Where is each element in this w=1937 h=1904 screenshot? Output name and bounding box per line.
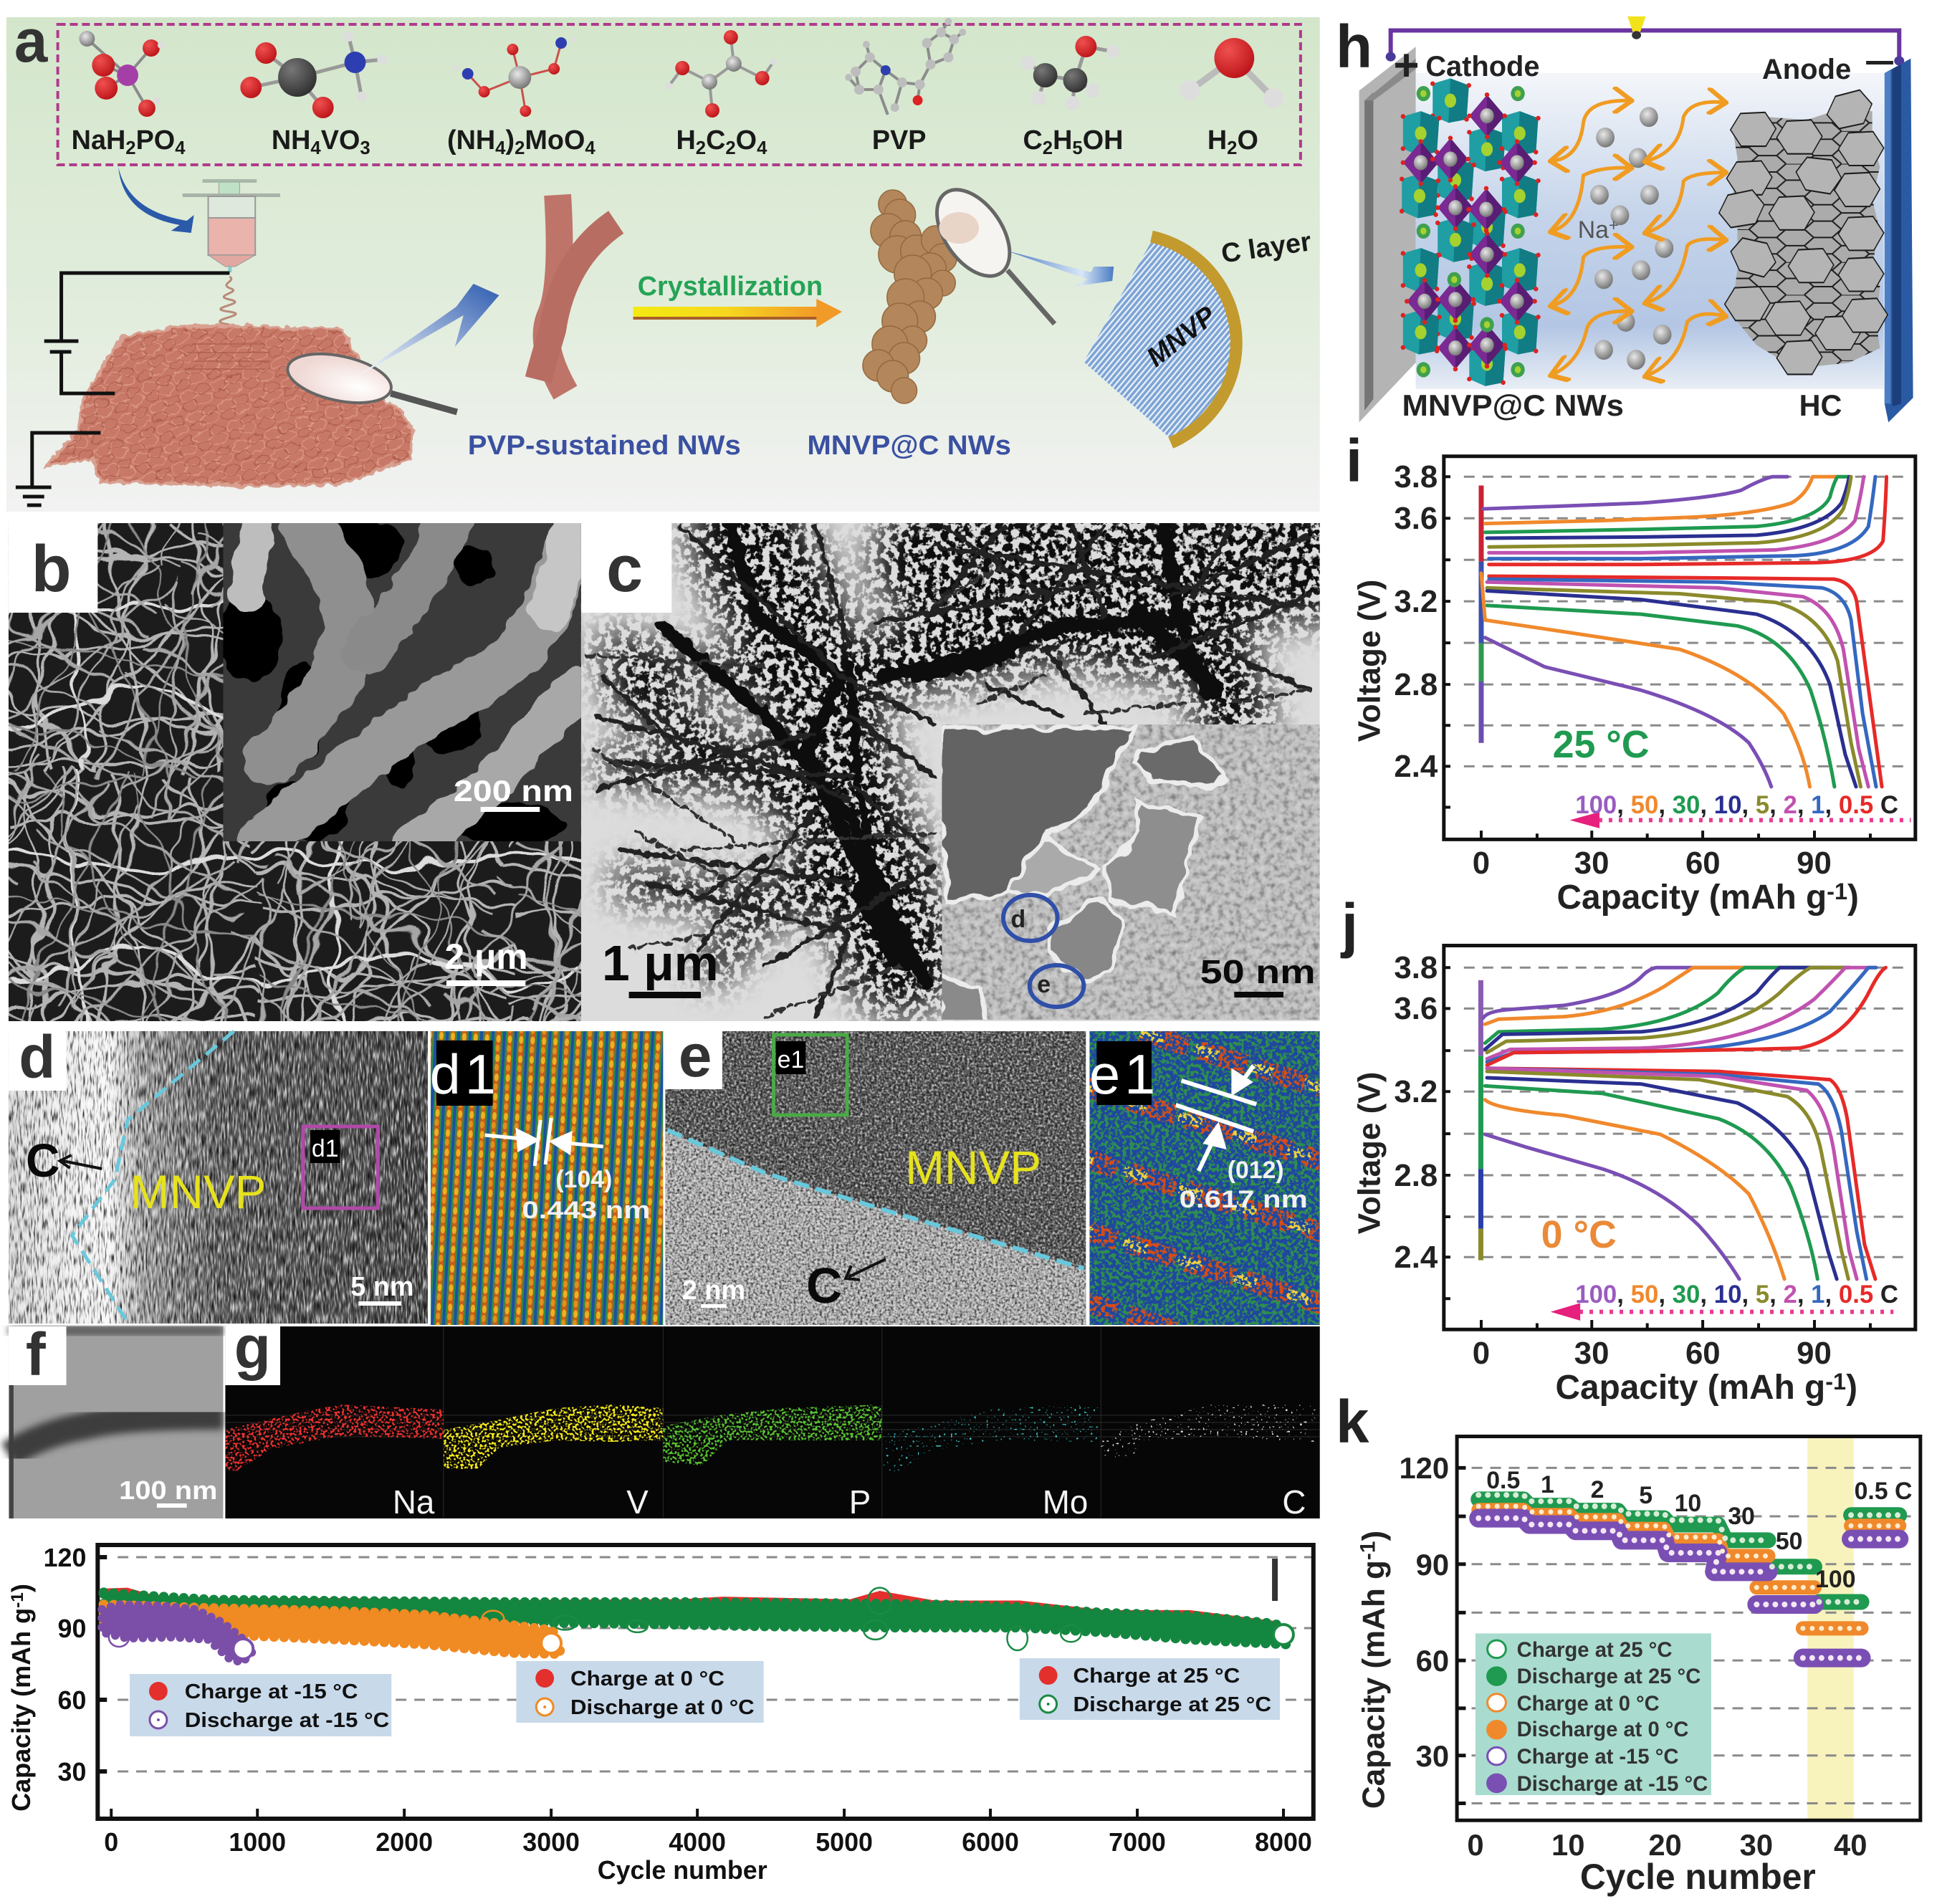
- molecule: C2H5OH: [1021, 36, 1119, 110]
- nanowire labels: PVP-sustained NWs: [468, 431, 741, 461]
- x title: ): [1846, 1369, 1857, 1407]
- plot frame: [97, 1545, 1314, 1819]
- MNVP label: MNVP: [130, 1165, 266, 1218]
- d1 marker box: d1: [312, 1135, 339, 1162]
- legend 0 C: Charge at 0 °C: [570, 1668, 724, 1690]
- fibre mat: [47, 326, 413, 486]
- Mo map: [882, 1405, 1098, 1473]
- anode text: Anode: [1762, 54, 1851, 85]
- panel letter d: d: [19, 1023, 55, 1091]
- panel letter a: a: [14, 7, 49, 75]
- legend box: [1476, 1633, 1711, 1795]
- scale bar 100 nm: 100 nm: [119, 1475, 217, 1505]
- legend text: Discharge at -15 °C: [1517, 1772, 1708, 1796]
- left column of panels: [0, 7, 1341, 1885]
- reagent labels: 2: [515, 138, 525, 158]
- y ticks: 3.2: [1394, 1074, 1438, 1109]
- lattice label: [1180, 1157, 1308, 1213]
- reagent labels: 5: [1072, 138, 1083, 158]
- legend 25 C: Discharge at 25 °C: [1073, 1693, 1271, 1716]
- carbon label: C: [806, 1258, 842, 1314]
- reagent labels: VO: [321, 125, 360, 156]
- panel letter d: [9, 1023, 67, 1091]
- crystal structure: [1400, 78, 1541, 386]
- rate direction arrow: [1551, 1303, 1893, 1321]
- y ticks: 3.6: [1394, 501, 1438, 536]
- legend text: Discharge at 0 °C: [1517, 1718, 1688, 1741]
- x title: ): [1847, 879, 1859, 917]
- reagent labels: O: [1237, 125, 1258, 156]
- scale bar 200 nm: [454, 780, 571, 812]
- rate labels: 100, 50, 30, 10, 5, 2, 1, 0.5 C: [1575, 1281, 1898, 1309]
- carbon boundary: [667, 1130, 1084, 1268]
- rate labels: 30: [1728, 1503, 1755, 1530]
- panel j: voltage profile 0 C: [1340, 891, 1916, 1407]
- reagent labels: 4: [585, 138, 596, 158]
- y tick labels: 90: [58, 1614, 86, 1643]
- x tick labels: [104, 1827, 1312, 1857]
- temperature label: 0 °C: [1541, 1213, 1617, 1256]
- reagent labels: 3: [360, 138, 370, 158]
- reagent labels: 2: [125, 138, 136, 158]
- y ticks: 2.8: [1394, 1158, 1438, 1193]
- reagent labels: 2: [1043, 138, 1053, 158]
- y ticks: [1394, 950, 1438, 1275]
- scale bar 2 nm: 2 nm: [682, 1276, 745, 1306]
- x ticks: 20: [1648, 1828, 1682, 1862]
- electrolyte: [1416, 73, 1884, 389]
- legend text: Charge at 0 °C: [1517, 1692, 1660, 1716]
- MNVP wedge: [1084, 236, 1236, 443]
- e1 marker box: e1: [778, 1046, 804, 1073]
- nanowire labels: [468, 431, 1011, 461]
- panel h: full cell schematic: [1336, 13, 1913, 422]
- scale bar 200 nm: 200 nm: [454, 774, 573, 808]
- y ticks: 2.8: [1394, 667, 1438, 702]
- x tick labels: 3000: [522, 1827, 580, 1857]
- reagent labels: C: [1023, 125, 1043, 156]
- legend 25 C: Charge at 25 °C: [1073, 1665, 1240, 1688]
- cathode text: [1393, 41, 1539, 90]
- panel d1: filtered lattice: [430, 1031, 663, 1325]
- x ticks: 60: [1685, 846, 1721, 881]
- element labels: P: [849, 1483, 871, 1521]
- panel k: rate capability chart: [1336, 1388, 1921, 1897]
- carbon boundary: [72, 1031, 234, 1322]
- x ticks: 0: [1473, 846, 1490, 881]
- x ticks: 90: [1797, 846, 1832, 881]
- legend text: [1517, 1638, 1708, 1796]
- carbon label: C: [26, 1134, 59, 1187]
- legend 0 C: Discharge at 0 °C: [570, 1696, 755, 1719]
- lattice spacing arrows: [485, 1118, 603, 1166]
- panel letter k: k: [1336, 1388, 1369, 1455]
- y ticks: [97, 1557, 107, 1771]
- panel letter b: [9, 523, 97, 613]
- reagent labels: C: [706, 125, 725, 156]
- anode text: [1762, 54, 1893, 85]
- panel letter c: [581, 523, 671, 613]
- reagent labels: H: [676, 125, 696, 156]
- reagent labels: H: [1053, 125, 1072, 156]
- SEM inset: [217, 516, 581, 846]
- circle labels: [1012, 909, 1050, 993]
- cathode text: +: [1393, 41, 1419, 90]
- reagent labels: 4: [175, 138, 186, 158]
- ion migration arrows: [1552, 100, 1724, 375]
- MNVP label: MNVP: [905, 1141, 1041, 1194]
- x tick labels: 1000: [229, 1827, 286, 1857]
- nanowire shadow: [9, 1416, 223, 1455]
- spike at origin: [1478, 980, 1483, 1260]
- molecule: NH4VO3: [240, 32, 387, 118]
- reagent labels: 2: [725, 138, 736, 158]
- rate direction arrow: [1570, 812, 1910, 828]
- x tick labels: 6000: [962, 1827, 1019, 1857]
- y ticks: [1399, 1451, 1449, 1773]
- molecule: (NH4)2MoO4: [454, 37, 577, 117]
- bottom labels: [1402, 388, 1842, 422]
- molecule: PVP: [845, 18, 966, 115]
- rate labels: 2: [1591, 1476, 1604, 1503]
- scale bar 1 um: 1 μm: [602, 935, 719, 991]
- rate labels: 100, 50, 30, 10, 5, 2, 1, 0.5 C: [1575, 791, 1898, 819]
- panel i: voltage profile 25 C: [1346, 427, 1916, 917]
- molecule: H2O: [1180, 38, 1283, 108]
- panel letter g: [225, 1314, 280, 1385]
- legend 25 C: [1020, 1658, 1280, 1720]
- Na+ label: +: [1609, 216, 1618, 234]
- reagent labels: (NH: [447, 125, 495, 156]
- reagent labels: 2: [696, 138, 706, 158]
- temperature label: 25 °C: [1553, 723, 1650, 766]
- legend -15 C: Charge at -15 °C: [185, 1680, 358, 1703]
- charge and discharge curves: [1481, 477, 1887, 787]
- gridlines: [118, 1557, 1314, 1771]
- blue arrow to nanowires: [357, 284, 499, 377]
- panel letter b: b: [32, 532, 72, 606]
- reagent labels: 4: [495, 138, 506, 158]
- lattice label: (012): [1228, 1157, 1284, 1184]
- rate labels: 50: [1776, 1528, 1802, 1555]
- C layer label: C layer: [1220, 226, 1314, 269]
- reagent labels: PVP: [872, 125, 927, 156]
- panel a: synthesis schematic: [6, 7, 1320, 512]
- molecule: NaH2PO4: [79, 31, 165, 117]
- reagent labels: MoO: [525, 125, 585, 156]
- rate labels: 0.5: [1486, 1467, 1520, 1494]
- y tick labels: 30: [58, 1757, 86, 1786]
- C map: [1101, 1405, 1316, 1462]
- element labels: [393, 1483, 1306, 1521]
- TEM inset: [938, 724, 1320, 1025]
- x axis title: Cycle number: [598, 1855, 767, 1885]
- legend -15 C: [130, 1674, 391, 1736]
- panel letter e: [665, 1022, 722, 1089]
- bottom labels: MNVP@C NWs: [1402, 388, 1624, 422]
- rate labels: 1: [1541, 1471, 1554, 1498]
- y ticks: 60: [1416, 1644, 1449, 1678]
- scale bar 1 um: [605, 946, 715, 998]
- x ticks: 60: [1685, 1336, 1721, 1371]
- panel letter g: g: [234, 1314, 271, 1381]
- hard carbon sheets: [1718, 87, 1888, 374]
- x ticks: 0: [1467, 1828, 1484, 1862]
- legend -15 C: Discharge at -15 °C: [185, 1709, 389, 1732]
- x ticks: 30: [1574, 846, 1609, 881]
- x title: -1: [1827, 879, 1847, 904]
- cathode plate: [1359, 47, 1416, 422]
- element labels: Mo: [1043, 1483, 1088, 1521]
- rate labels: [1486, 1467, 1912, 1593]
- element labels: C: [1282, 1483, 1306, 1521]
- sodium ions: [1590, 107, 1673, 370]
- d1 marker box: [303, 1126, 378, 1208]
- lattice label: (104): [555, 1166, 612, 1193]
- reagent labels: 4: [310, 138, 321, 158]
- y title: -1: [1357, 1541, 1380, 1560]
- axes frame: [1444, 946, 1916, 1329]
- circle labels: e: [1037, 971, 1051, 998]
- y tick labels: [44, 1543, 86, 1786]
- lattice label: 0.617 nm: [1180, 1186, 1308, 1213]
- carbon label: [26, 1134, 102, 1187]
- Na+ label: Na: [1578, 216, 1609, 244]
- panel b: SEM images: [9, 523, 581, 1021]
- panel e: HRTEM: [665, 1022, 1086, 1325]
- series end markers: [233, 1625, 1293, 1659]
- reagent labels: 4: [757, 138, 767, 158]
- panel g: elemental maps: [225, 1314, 1320, 1521]
- crystallization arrow: [633, 299, 842, 327]
- panel d: HRTEM: [9, 1023, 428, 1324]
- legend text: Discharge at 25 °C: [1517, 1665, 1701, 1688]
- y ticks: 3.2: [1394, 584, 1438, 619]
- scale bar 50 nm: 50 nm: [1200, 953, 1316, 990]
- y ticks: 3.6: [1394, 991, 1438, 1026]
- PVP nanowires: [538, 195, 616, 393]
- bulb: [1627, 16, 1646, 39]
- anode plate: [1885, 59, 1913, 422]
- y ticks: 30: [1416, 1739, 1449, 1773]
- panel letter f: [9, 1321, 67, 1388]
- reagent labels: OH: [1083, 125, 1123, 156]
- x title: Cycle number: [1580, 1857, 1816, 1897]
- rate labels: 0.5 C: [1855, 1478, 1912, 1505]
- blue arrow to wedge: [1007, 251, 1114, 287]
- x tick labels: 4000: [669, 1827, 726, 1857]
- y ticks: 120: [1399, 1451, 1449, 1485]
- reagent labels: PO: [136, 125, 175, 156]
- x ticks: 30: [1740, 1828, 1773, 1862]
- plot frame: [1457, 1437, 1921, 1820]
- scale bar 50 nm: [1201, 960, 1313, 998]
- x tick labels: 7000: [1109, 1827, 1166, 1857]
- data rows: [1478, 1495, 1899, 1658]
- x ticks: 40: [1834, 1828, 1867, 1862]
- x ticks: [111, 1809, 1283, 1819]
- y ticks: 3.8: [1394, 950, 1438, 985]
- magnifier 1: [283, 345, 457, 412]
- x ticks: 10: [1551, 1828, 1585, 1862]
- panel f: STEM image: [9, 1321, 223, 1518]
- panel letter e: e: [679, 1022, 712, 1089]
- panel l: long cycling chart: [6, 1543, 1314, 1885]
- y axis title: ): [6, 1584, 36, 1592]
- x ticks: 90: [1797, 1336, 1832, 1371]
- y axis title: Capacity (mAh g: [6, 1608, 36, 1812]
- x tick labels: 5000: [816, 1827, 873, 1857]
- x title: -1: [1825, 1369, 1846, 1394]
- bottom labels: HC: [1799, 388, 1842, 422]
- scale bar 2 um: [446, 944, 526, 986]
- axes frame: [1444, 456, 1916, 839]
- y title: ): [1357, 1531, 1392, 1541]
- syringe: [183, 179, 280, 272]
- panel letter l: [1272, 1559, 1278, 1601]
- jet spring: [220, 277, 236, 325]
- circle labels: d: [1011, 906, 1025, 933]
- legend text: Charge at -15 °C: [1517, 1745, 1678, 1769]
- cathode text: Cathode: [1425, 51, 1539, 82]
- highlight band for 100 C: [1807, 1437, 1854, 1819]
- x ticks: 30: [1574, 1336, 1609, 1371]
- x ticks: 0: [1473, 1336, 1490, 1371]
- molecule: H2C2O4: [665, 30, 778, 118]
- reagent labels: NH: [272, 125, 310, 156]
- x tick labels: 2000: [376, 1827, 433, 1857]
- curved arrow to syringe: [118, 167, 194, 233]
- charge and discharge curves: [1483, 967, 1885, 1279]
- MNVP@C bead cluster: [863, 190, 957, 403]
- panel letter i: i: [1346, 427, 1362, 494]
- rate labels: 5: [1639, 1482, 1653, 1509]
- panel letter c: c: [606, 532, 643, 606]
- y ticks: 2.4: [1394, 749, 1438, 784]
- V map: [444, 1405, 663, 1469]
- x title: Capacity (mAh g: [1556, 1369, 1825, 1407]
- x ticks: [1473, 1336, 1832, 1371]
- carbon label: [806, 1258, 886, 1314]
- circles d and e: [1003, 895, 1084, 1007]
- label e1: e1: [1089, 1044, 1159, 1106]
- reagent box: [58, 24, 1301, 165]
- scale bar 2 um: 2 μm: [445, 937, 528, 977]
- x ticks: [1473, 846, 1832, 881]
- magnifier 2: [922, 176, 1055, 324]
- y title: Capacity (mAh g: [1357, 1560, 1392, 1809]
- lattice spacing arrows: [1176, 1066, 1256, 1171]
- y ticks: 90: [1416, 1548, 1449, 1582]
- reagent labels: NaH: [72, 125, 125, 156]
- x tick labels: 0: [104, 1827, 118, 1857]
- y title: Voltage (V): [1352, 1072, 1387, 1234]
- Na map: [225, 1405, 444, 1472]
- panel letter f: f: [26, 1321, 47, 1388]
- external wire: [1386, 30, 1904, 65]
- dense nanowire network: [612, 536, 1309, 967]
- spike at origin: [1478, 486, 1483, 743]
- y ticks: [1394, 459, 1438, 784]
- y tick labels: 120: [44, 1543, 86, 1572]
- wedge label: MNVP: [1142, 300, 1222, 373]
- y axis title: -1: [8, 1592, 27, 1608]
- electrospinning circuit: [16, 273, 229, 505]
- y ticks: 3.8: [1394, 459, 1438, 494]
- x ticks: [1467, 1828, 1867, 1862]
- right column of panels: [1336, 13, 1921, 1897]
- legend text: Charge at 25 °C: [1517, 1638, 1673, 1662]
- data bands: [102, 1588, 1290, 1663]
- element labels: Na: [393, 1483, 435, 1521]
- y title: Voltage (V): [1352, 580, 1387, 742]
- reagent labels: 2: [1227, 138, 1237, 158]
- reagent labels: ): [506, 125, 515, 156]
- P map: [663, 1405, 882, 1465]
- lattice label: 0.443 nm: [522, 1197, 650, 1224]
- reagent labels: [72, 125, 1258, 158]
- panel letter j: j: [1340, 891, 1358, 959]
- panel c: TEM images: [581, 523, 1320, 1025]
- nanowire labels: MNVP@C NWs: [807, 431, 1011, 461]
- reagent labels: H: [1207, 125, 1227, 156]
- rate labels: 10: [1675, 1490, 1701, 1517]
- e1 marker box: [774, 1035, 847, 1115]
- element labels: V: [626, 1483, 649, 1521]
- label d1: d1: [430, 1044, 500, 1106]
- x tick labels: 8000: [1255, 1827, 1312, 1857]
- legend 0 C: [516, 1661, 764, 1723]
- lattice label: [522, 1166, 650, 1224]
- panel letter h: h: [1336, 13, 1372, 80]
- y tick labels: 60: [58, 1685, 86, 1715]
- rate labels: 100: [1815, 1566, 1856, 1593]
- x title: Capacity (mAh g: [1557, 879, 1827, 917]
- reagent labels: O: [736, 125, 757, 156]
- panel e1: filtered lattice: [1069, 1031, 1341, 1341]
- y ticks: 2.4: [1394, 1240, 1438, 1275]
- crystallization label: Crystallization: [638, 272, 823, 302]
- scale bar 5 nm: 5 nm: [350, 1272, 413, 1302]
